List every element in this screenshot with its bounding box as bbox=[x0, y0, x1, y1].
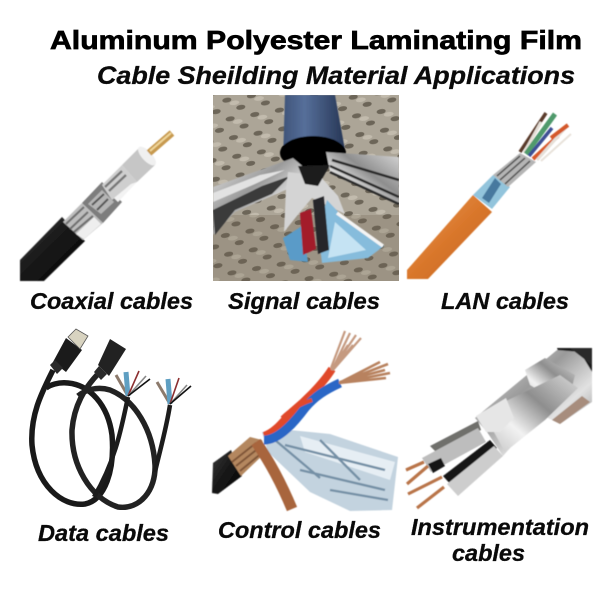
panel: signal cables bbox=[213, 95, 399, 314]
label: signal cables: Signal cables bbox=[228, 288, 380, 314]
label: data cables: Data cables bbox=[38, 520, 169, 546]
image: instrumentation cable bbox=[406, 348, 592, 508]
image: control cable bbox=[212, 331, 398, 511]
title bbox=[50, 25, 582, 90]
label: LAN cables: LAN cables bbox=[441, 288, 569, 314]
image: data cables bbox=[32, 329, 191, 507]
title line 2: Cable Sheilding Material Applications bbox=[97, 62, 575, 90]
label line 2: cables bbox=[452, 540, 525, 566]
panel: LAN cables bbox=[407, 113, 571, 314]
panel: instrumentation cables bbox=[406, 348, 592, 566]
label line 1: Instrumentation bbox=[411, 514, 589, 540]
label: instrumentation cables bbox=[411, 514, 589, 566]
label: coaxial cables: Coaxial cables bbox=[30, 288, 193, 314]
image: LAN cable bbox=[407, 113, 571, 279]
label: control cables: Control cables bbox=[218, 517, 381, 543]
panel: data cables bbox=[32, 329, 191, 546]
panel: control cables bbox=[212, 331, 398, 543]
image: signal cable bbox=[213, 95, 399, 281]
title line 1: Aluminum Polyester Laminating Film bbox=[50, 25, 582, 55]
panel: coaxial cables bbox=[20, 133, 193, 314]
image: coaxial cable bbox=[20, 133, 172, 281]
